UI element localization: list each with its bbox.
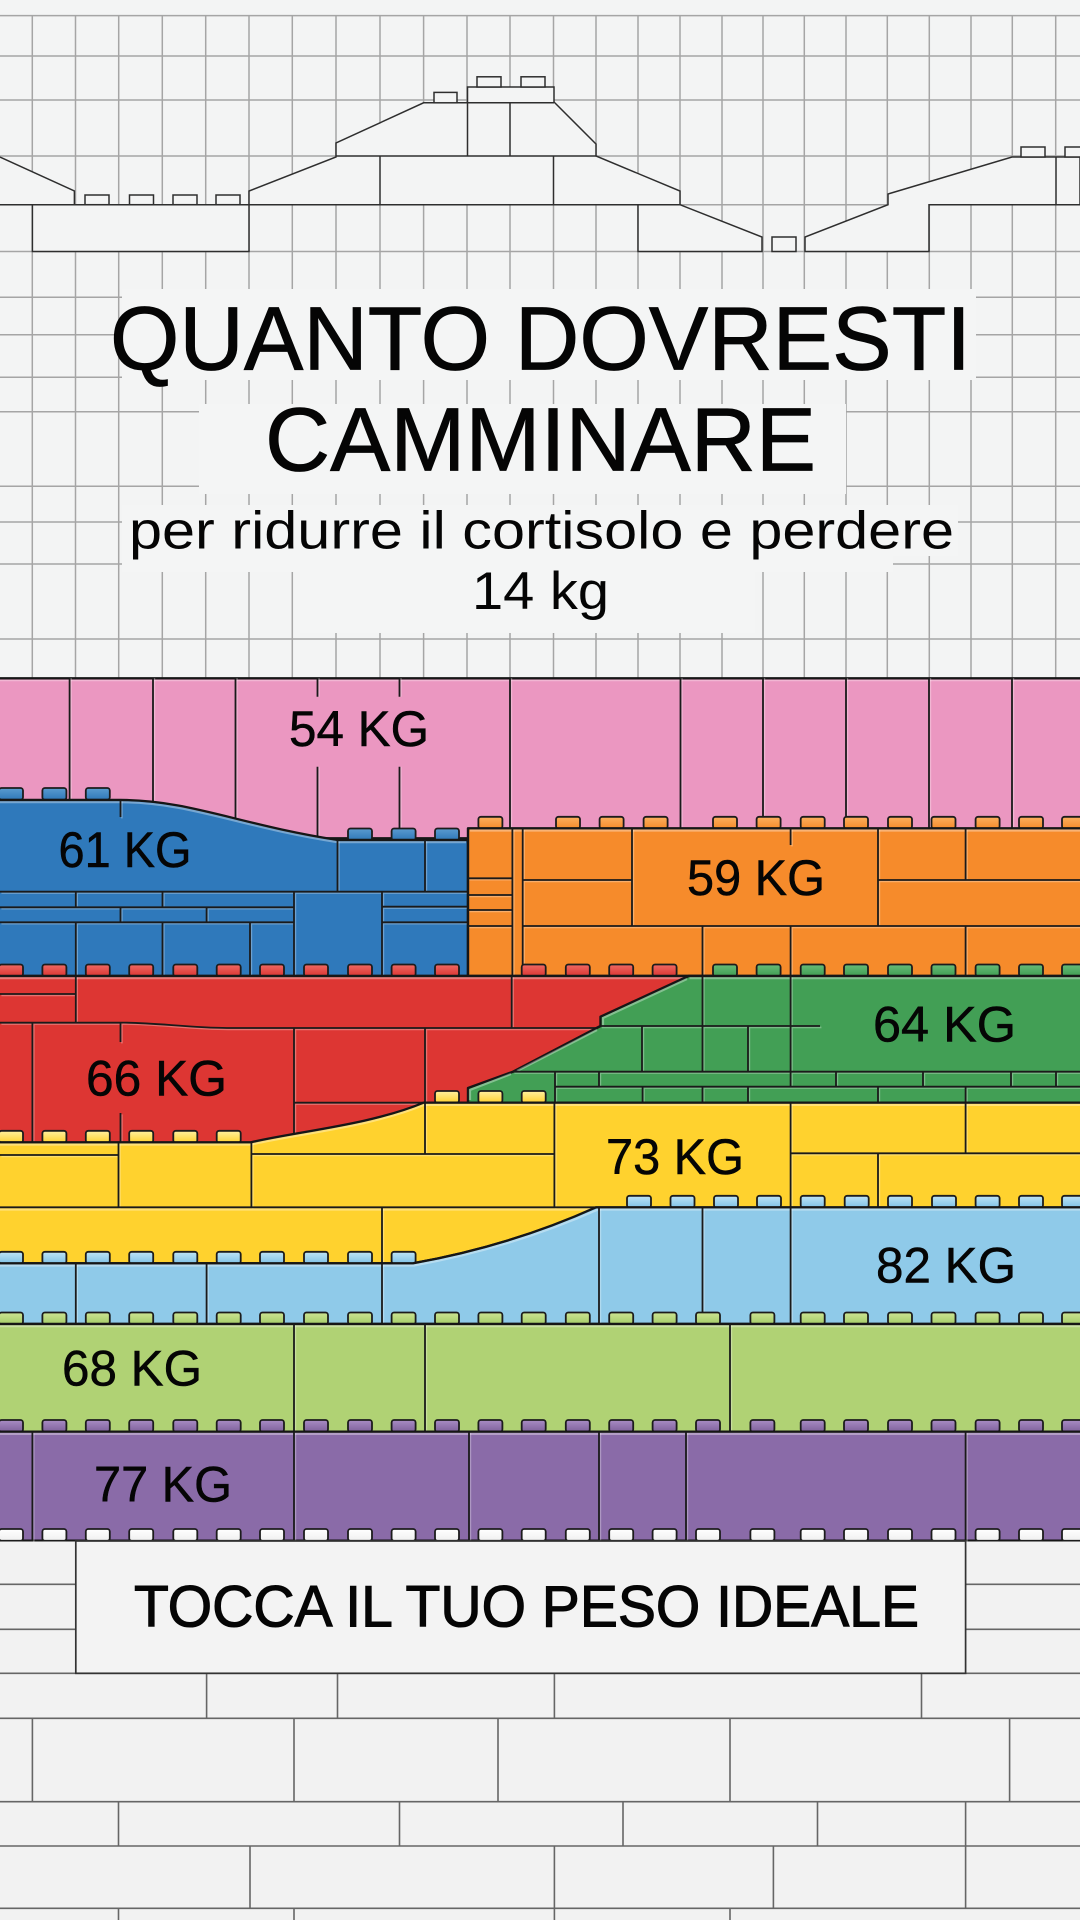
title: QUANTO DOVRESTI [110, 290, 971, 390]
band: 68 KG light green [0, 1312, 1080, 1433]
label: 59 KG: 59 KG [687, 850, 825, 906]
label: 73 KG: 73 KG [606, 1129, 744, 1185]
band: 64 KG green [468, 964, 1080, 1104]
band: 59 KG orange [468, 817, 1080, 977]
label: 61 KG: 61 KG [58, 822, 192, 878]
title: CAMMINARE [265, 390, 816, 490]
title [110, 290, 971, 490]
label: 66 KG: 66 KG [86, 1051, 227, 1107]
subtitle [129, 502, 954, 621]
band: 82 KG light blue [0, 1196, 1080, 1325]
band: 77 KG purple [0, 1420, 1080, 1542]
title backing patches [122, 289, 976, 633]
label: 68 KG: 68 KG [62, 1341, 202, 1397]
castle outline skyline [0, 77, 1080, 252]
label: 64 KG: 64 KG [873, 997, 1016, 1053]
label: 82 KG: 82 KG [876, 1238, 1016, 1294]
white studs row [0, 1529, 1080, 1541]
call to action button [76, 1541, 966, 1673]
band: 73 KG yellow [0, 1091, 1080, 1265]
subtitle: 14 kg [472, 562, 609, 621]
label: 77 KG: 77 KG [94, 1457, 232, 1513]
subtitle: per ridurre il cortisolo e perdere [129, 502, 954, 561]
label: 54 KG: 54 KG [289, 701, 429, 757]
button label: TOCCA IL TUO PESO IDEALE [134, 1575, 919, 1640]
top grid panel [0, 16, 1080, 678]
band: 61 KG blue [0, 788, 469, 977]
band: 54 KG pink [0, 678, 1080, 840]
bottom brick wall panel [0, 1542, 1080, 1920]
band: 66 KG red [0, 964, 718, 1144]
